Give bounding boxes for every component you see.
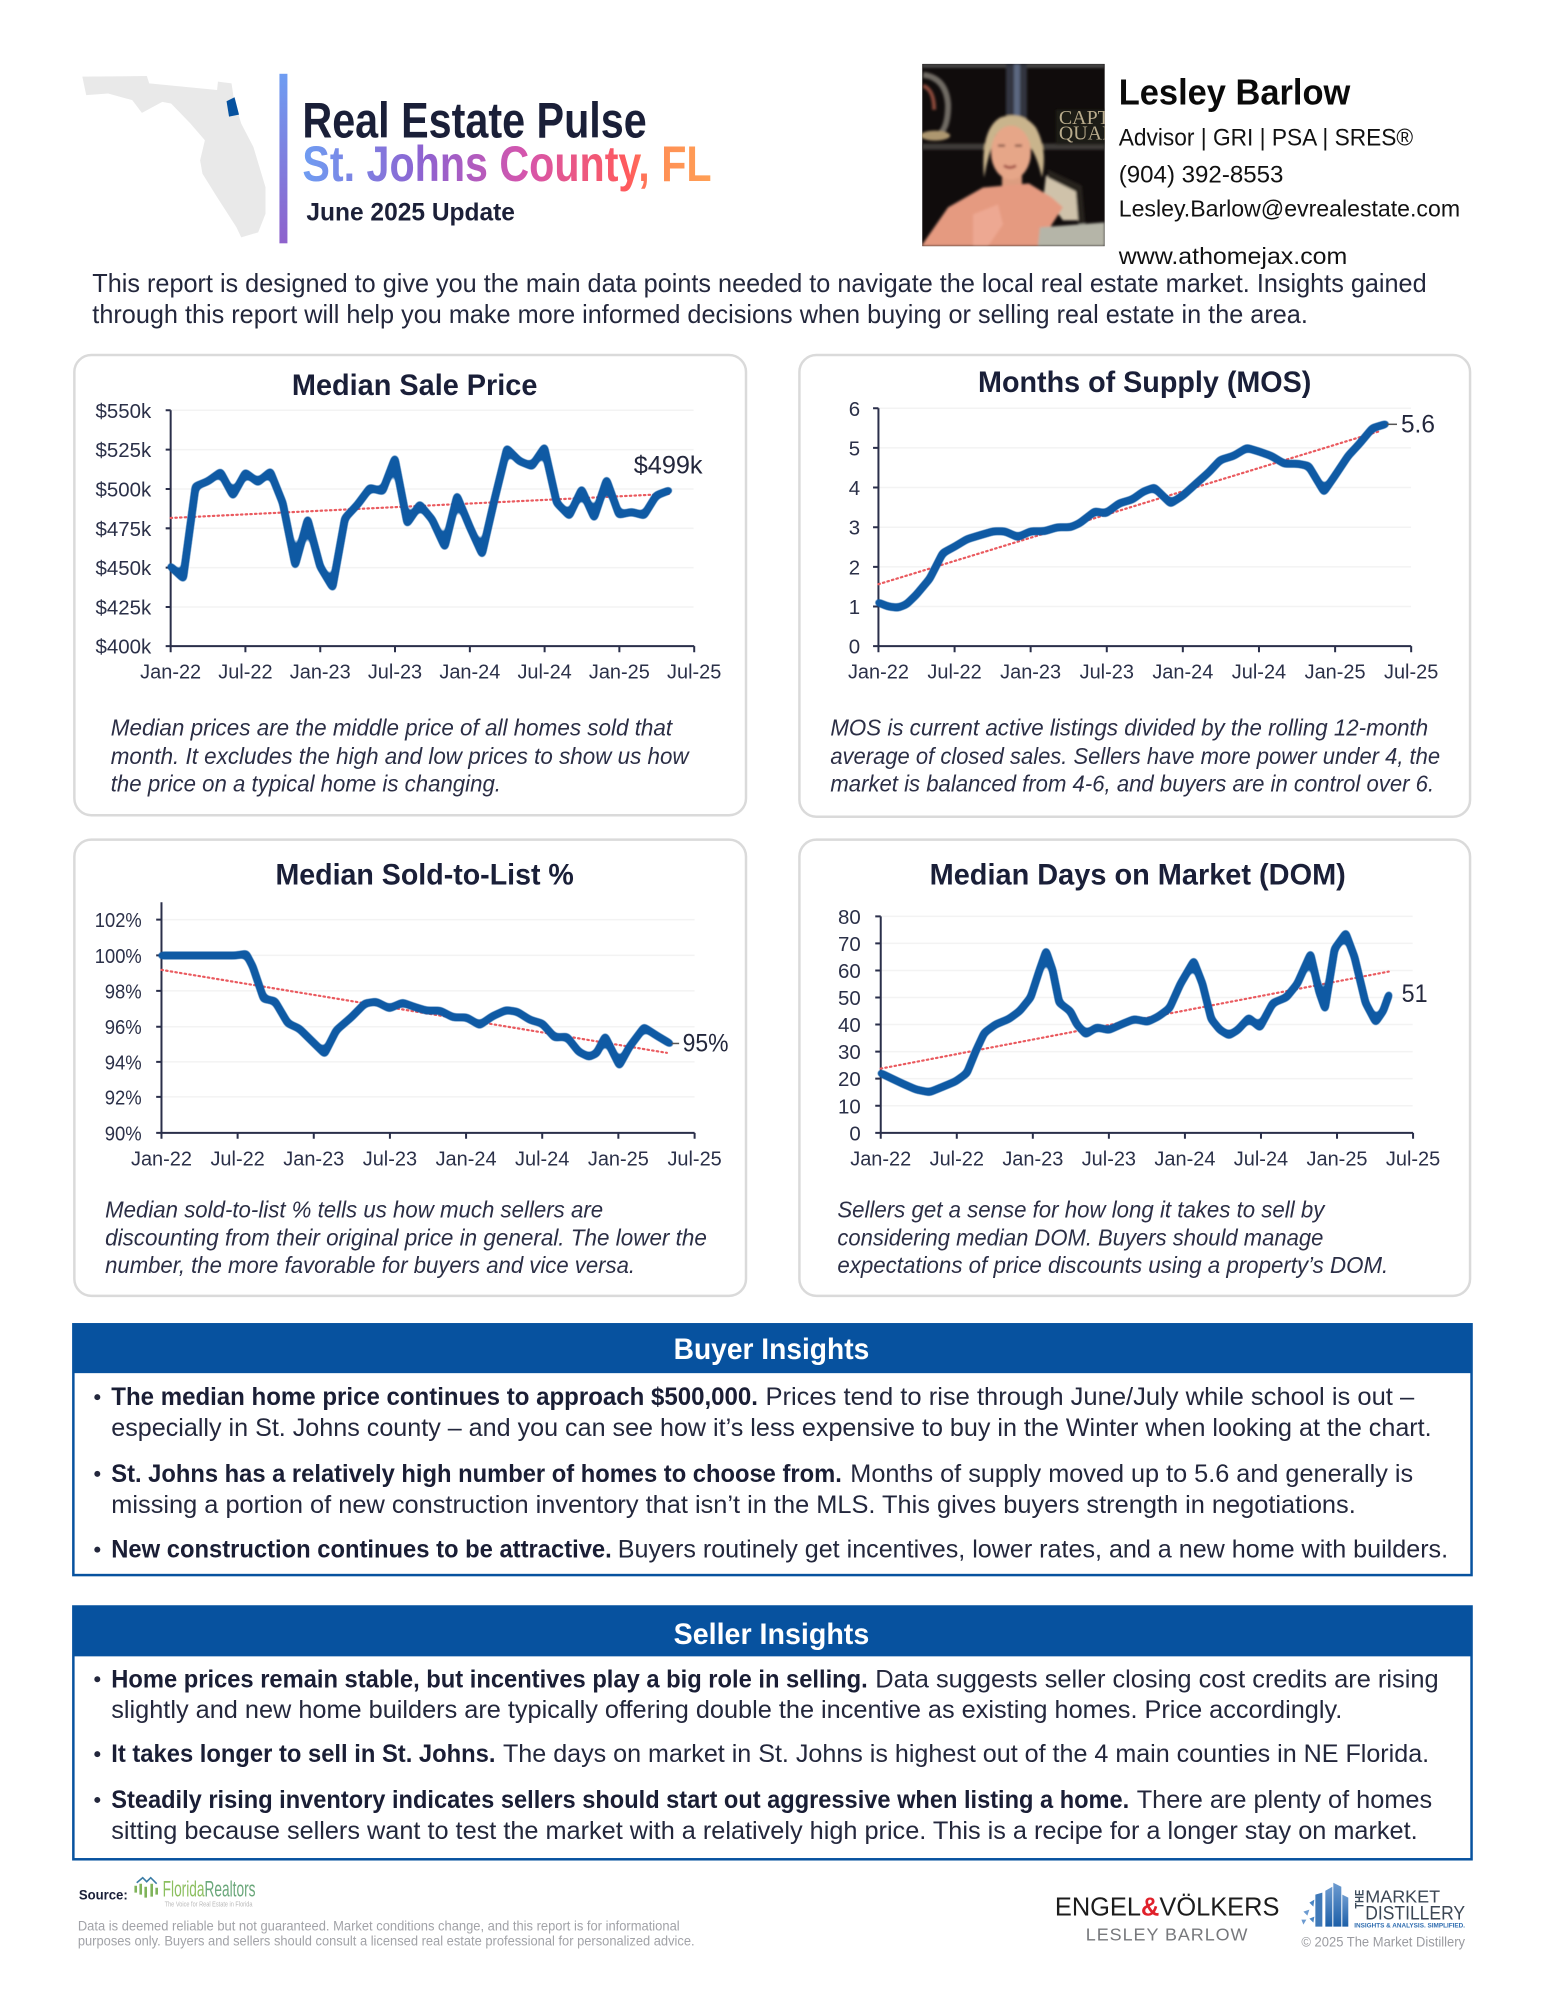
line chart: days on market: 30 [838,1041,861,1064]
header: county map and title [82,74,712,243]
logo: Engel & Völkers: ENGEL&VÖLKERS [1055,1894,1279,1922]
bullet: home prices and incentives: Data suggests seller closing cost credits are rising [875,1665,1439,1693]
logo: Florida Realtors: The Voice for Real Estate in Florida [165,1900,253,1909]
line chart: months of supply: Jul-22 [927,661,982,683]
advisor contact details [1118,72,1460,269]
panel: buyer insights [73,1324,1472,1575]
source label: Source: [79,1887,128,1903]
title: Real Estate Pulse [302,93,647,149]
line chart: months of supply: Jan-23 [1000,661,1061,683]
line chart: sold-to-list: Jul-23 [363,1149,417,1171]
phone: (904) 392-8553 [1119,161,1283,188]
bullet: home prices and incentives: Home prices remain stable, but incentives play a big role in selling. [111,1665,868,1693]
line chart: median sale price [96,400,721,683]
credentials: Advisor | GRI | PSA | SRES® [1119,125,1414,152]
panel: median sale price [74,355,746,815]
date line: June 2025 Update [306,198,515,226]
heading: Months of Supply (MOS) [978,366,1311,399]
bullet: homes to choose from [94,1460,1413,1519]
line chart: days on market: 40 [838,1014,861,1037]
description: month. It excludes the high and low prices to show us how [111,743,690,769]
line chart: days on market: Jan-23 [1002,1149,1063,1171]
line chart: months of supply: Jan-24 [1152,661,1213,683]
bullet: rising inventory: There are plenty of homes [1137,1786,1432,1814]
line chart: median sale price: $525k [96,439,152,462]
heading bar: Buyer Insights [674,1333,869,1366]
panel: median sold-to-list [74,840,746,1296]
line chart: median sale price: $400k [96,636,152,659]
description: market is balanced from 4-6, and buyers are in control over 6. [830,770,1434,796]
line chart: sold-to-list: Jul-22 [210,1149,265,1171]
description [830,714,1440,796]
panel: median days on market [799,840,1470,1296]
heading: Median Days on Market (DOM) [930,859,1346,892]
advisor photo: CAPT [1059,107,1110,129]
advisor name: Lesley Barlow [1119,72,1350,113]
line chart: months of supply: 1 [849,596,860,619]
line chart: days on market: Jul-24 [1234,1149,1288,1171]
line chart: days on market: 10 [838,1095,861,1118]
bullet: rising inventory [94,1786,1432,1845]
line chart: days on market: 80 [838,906,861,929]
panel: seller insights [73,1606,1472,1859]
description: considering median DOM. Buyers should manage [837,1225,1323,1251]
line chart: median sale price: Jul-22 [218,661,273,683]
line chart: sold-to-list: 96% [105,1016,142,1039]
bullet: median home price [94,1383,1432,1442]
wordmark: INSIGHTS & ANALYSIS. SIMPLIFIED. [1354,1923,1465,1930]
line chart: median sale price: Jan-23 [290,661,351,683]
line chart: sold-to-list: Jul-25 [667,1149,722,1171]
panel: months of supply [799,355,1470,817]
line chart: sold-to-list: Jan-25 [588,1149,649,1171]
bullet: homes to choose from: Months of supply moved up to 5.6 and generally is [850,1460,1413,1488]
line chart: months of supply: Jan-25 [1305,661,1366,683]
line chart: median sale price: $475k [96,518,152,541]
intro text: This report is designed to give you the main data points needed to navigate the local real estate market. Insights gained [92,270,1427,298]
logo: Engel & Völkers: LESLEY BARLOW [1086,1925,1248,1945]
bullet: new construction: Buyers routinely get incentives, lower rates, and a new home with builders. [618,1536,1448,1564]
line chart: median sale price: $550k [96,400,152,423]
description: the price on a typical home is changing. [111,770,501,796]
description [837,1197,1388,1278]
line chart: days on market: Jul-22 [930,1149,984,1171]
icon: distillery skyline [1301,1883,1348,1927]
bullet: rising inventory: Steadily rising inventory indicates sellers should start out aggressive when listing a home. [111,1786,1129,1814]
line chart: sold-to-list: 94% [105,1051,142,1074]
line chart: sold-to-list: 100% [95,945,142,968]
advisor photo [920,64,1116,246]
intro text: through this report will help you make more informed decisions when buying or selling real estate in the area. [92,301,1308,329]
line chart: median sale price: $500k [96,478,152,502]
bullet: longer to sell: The days on market in St. Johns is highest out of the 4 main counties in NE Florida. [503,1740,1429,1768]
line chart: days on market: 0 [849,1122,861,1145]
bullet: home prices and incentives: slightly and new home builders are typically offering double the incentive as existing homes. Price accordingly. [111,1696,1342,1724]
description: Median sold-to-list % tells us how much sellers are [105,1197,603,1223]
line chart: sold-to-list [95,902,729,1171]
description: MOS is current active listings divided by the rolling 12-month [830,714,1428,740]
bullet: median home price: especially in St. Johns county – and you can see how it’s less expensive to buy in the Winter when looking at the chart. [111,1414,1432,1442]
line chart: sold-to-list: 92% [105,1086,142,1109]
heading: Median Sale Price [292,369,537,402]
line chart: median sale price: Jul-25 [667,661,721,683]
footer: source and disclaimer [78,1877,695,1949]
bullet: home prices and incentives [94,1665,1439,1724]
line chart: sold-to-list: 98% [105,980,142,1003]
copyright: © 2025 The Market Distillery [1301,1934,1465,1950]
bullet: homes to choose from: missing a portion of new construction inventory that isn’t in the MLS. This gives buyers strength in negotiations. [111,1491,1356,1519]
line chart: days on market: 50 [838,987,861,1010]
disclaimer: Data is deemed reliable but not guaranteed. Market conditions change, and this report is for informational [78,1918,680,1934]
line chart: months of supply [848,398,1438,683]
intro text [92,270,1427,329]
line chart: median sale price: $450k [96,557,152,580]
bullet: median home price: The median home price continues to approach $500,000. [111,1383,758,1411]
line chart: months of supply: Jul-24 [1232,661,1286,683]
line chart: months of supply: 4 [849,477,860,500]
line chart: sold-to-list: Jul-24 [515,1149,569,1171]
heading: Median Sold-to-List % [275,859,574,892]
bullet: homes to choose from: St. Johns has a relatively high number of homes to choose from. [111,1460,842,1488]
line chart: days on market: Jan-24 [1154,1149,1215,1171]
line chart: months of supply: 2 [849,556,860,579]
wordmark: DISTILLERY [1365,1904,1465,1925]
bullet: rising inventory: sitting because sellers want to test the market with a relatively high price. This is a recipe for a longer stay on market. [111,1817,1418,1845]
wordmark [1352,1887,1465,1930]
line chart: median sale price: $499k [634,451,703,480]
line chart: months of supply: 5 [849,437,860,460]
line chart: months of supply: 3 [849,517,860,540]
disclaimer: purposes only. Buyers and sellers should consult a licensed real estate professional for personalized advice. [78,1933,695,1949]
line chart: months of supply: Jul-25 [1384,661,1438,683]
line chart: days on market: Jul-23 [1082,1149,1136,1171]
email: Lesley.Barlow@evrealestate.com [1119,195,1460,221]
heading bar [73,1324,1472,1373]
subtitle: county name: St. Johns County, FL [302,136,712,192]
line chart: days on market: 70 [838,933,861,956]
website: www.athomejax.com [1118,243,1347,269]
description: discounting from their original price in general. The lower the [105,1225,707,1251]
bullet: new construction [94,1536,1448,1564]
line chart: median sale price: Jul-24 [517,661,572,683]
bullet: new construction: New construction continues to be attractive. [111,1536,612,1564]
heading bar [73,1606,1472,1656]
bullet: longer to sell: It takes longer to sell in St. Johns. [111,1740,496,1768]
line chart: median sale price: Jan-22 [140,661,201,683]
logo: Florida Realtors: FloridaRealtors [163,1877,256,1902]
icon: Florida map with St. Johns County highlighted [82,76,265,237]
line chart: months of supply: 6 [849,398,860,421]
line chart: days on market: Jan-22 [850,1149,911,1171]
line chart: days on market: Jul-25 [1386,1149,1440,1171]
heading bar: Seller Insights [674,1618,869,1651]
bullet: longer to sell [94,1740,1429,1768]
bullet: median home price: Prices tend to rise through June/July while school is out – [765,1383,1415,1411]
wordmark: MARKET [1365,1887,1440,1907]
line chart: days on market: Jan-25 [1307,1149,1368,1171]
logo: Florida Realtors [136,1877,256,1909]
line chart: months of supply: 0 [849,636,860,659]
line chart: months of supply: Jan-22 [848,661,909,683]
description: average of closed sales. Sellers have more power under 4, the [830,743,1440,769]
description: expectations of price discounts using a property’s DOM. [837,1252,1388,1278]
line chart: days on market: 20 [838,1068,861,1091]
logo: The Market Distillery [1301,1883,1465,1950]
line chart: sold-to-list: 95% [683,1030,729,1058]
line chart: median sale price: Jul-23 [368,661,422,683]
description [105,1197,707,1278]
description: number, the more favorable for buyers and vice versa. [105,1252,635,1278]
line chart: sold-to-list: Jan-22 [131,1149,192,1171]
description: Median prices are the middle price of all homes sold that [111,714,674,740]
advisor photo: QUAR [1059,123,1116,145]
line chart: sold-to-list: Jan-24 [436,1149,497,1171]
accent bar [279,74,287,243]
line chart: sold-to-list: 102% [95,909,142,932]
line chart: months of supply: 5.6 [1401,410,1435,438]
line chart: median sale price: Jan-25 [589,661,650,683]
line chart: days on market [838,906,1440,1171]
logo: Engel & Völkers [1055,1894,1279,1945]
description [111,714,690,796]
line chart: days on market: 60 [838,960,861,983]
description: Sellers get a sense for how long it takes to sell by [837,1197,1326,1223]
disclaimer [78,1918,695,1949]
line chart: days on market: 51 [1402,980,1428,1008]
line chart: sold-to-list: Jan-23 [283,1149,344,1171]
line chart: months of supply: Jul-23 [1080,661,1134,683]
line chart: sold-to-list: 90% [105,1122,142,1145]
line chart: median sale price: $425k [96,596,152,620]
wordmark: THE [1352,1890,1366,1909]
line chart: median sale price: Jan-24 [439,661,500,683]
